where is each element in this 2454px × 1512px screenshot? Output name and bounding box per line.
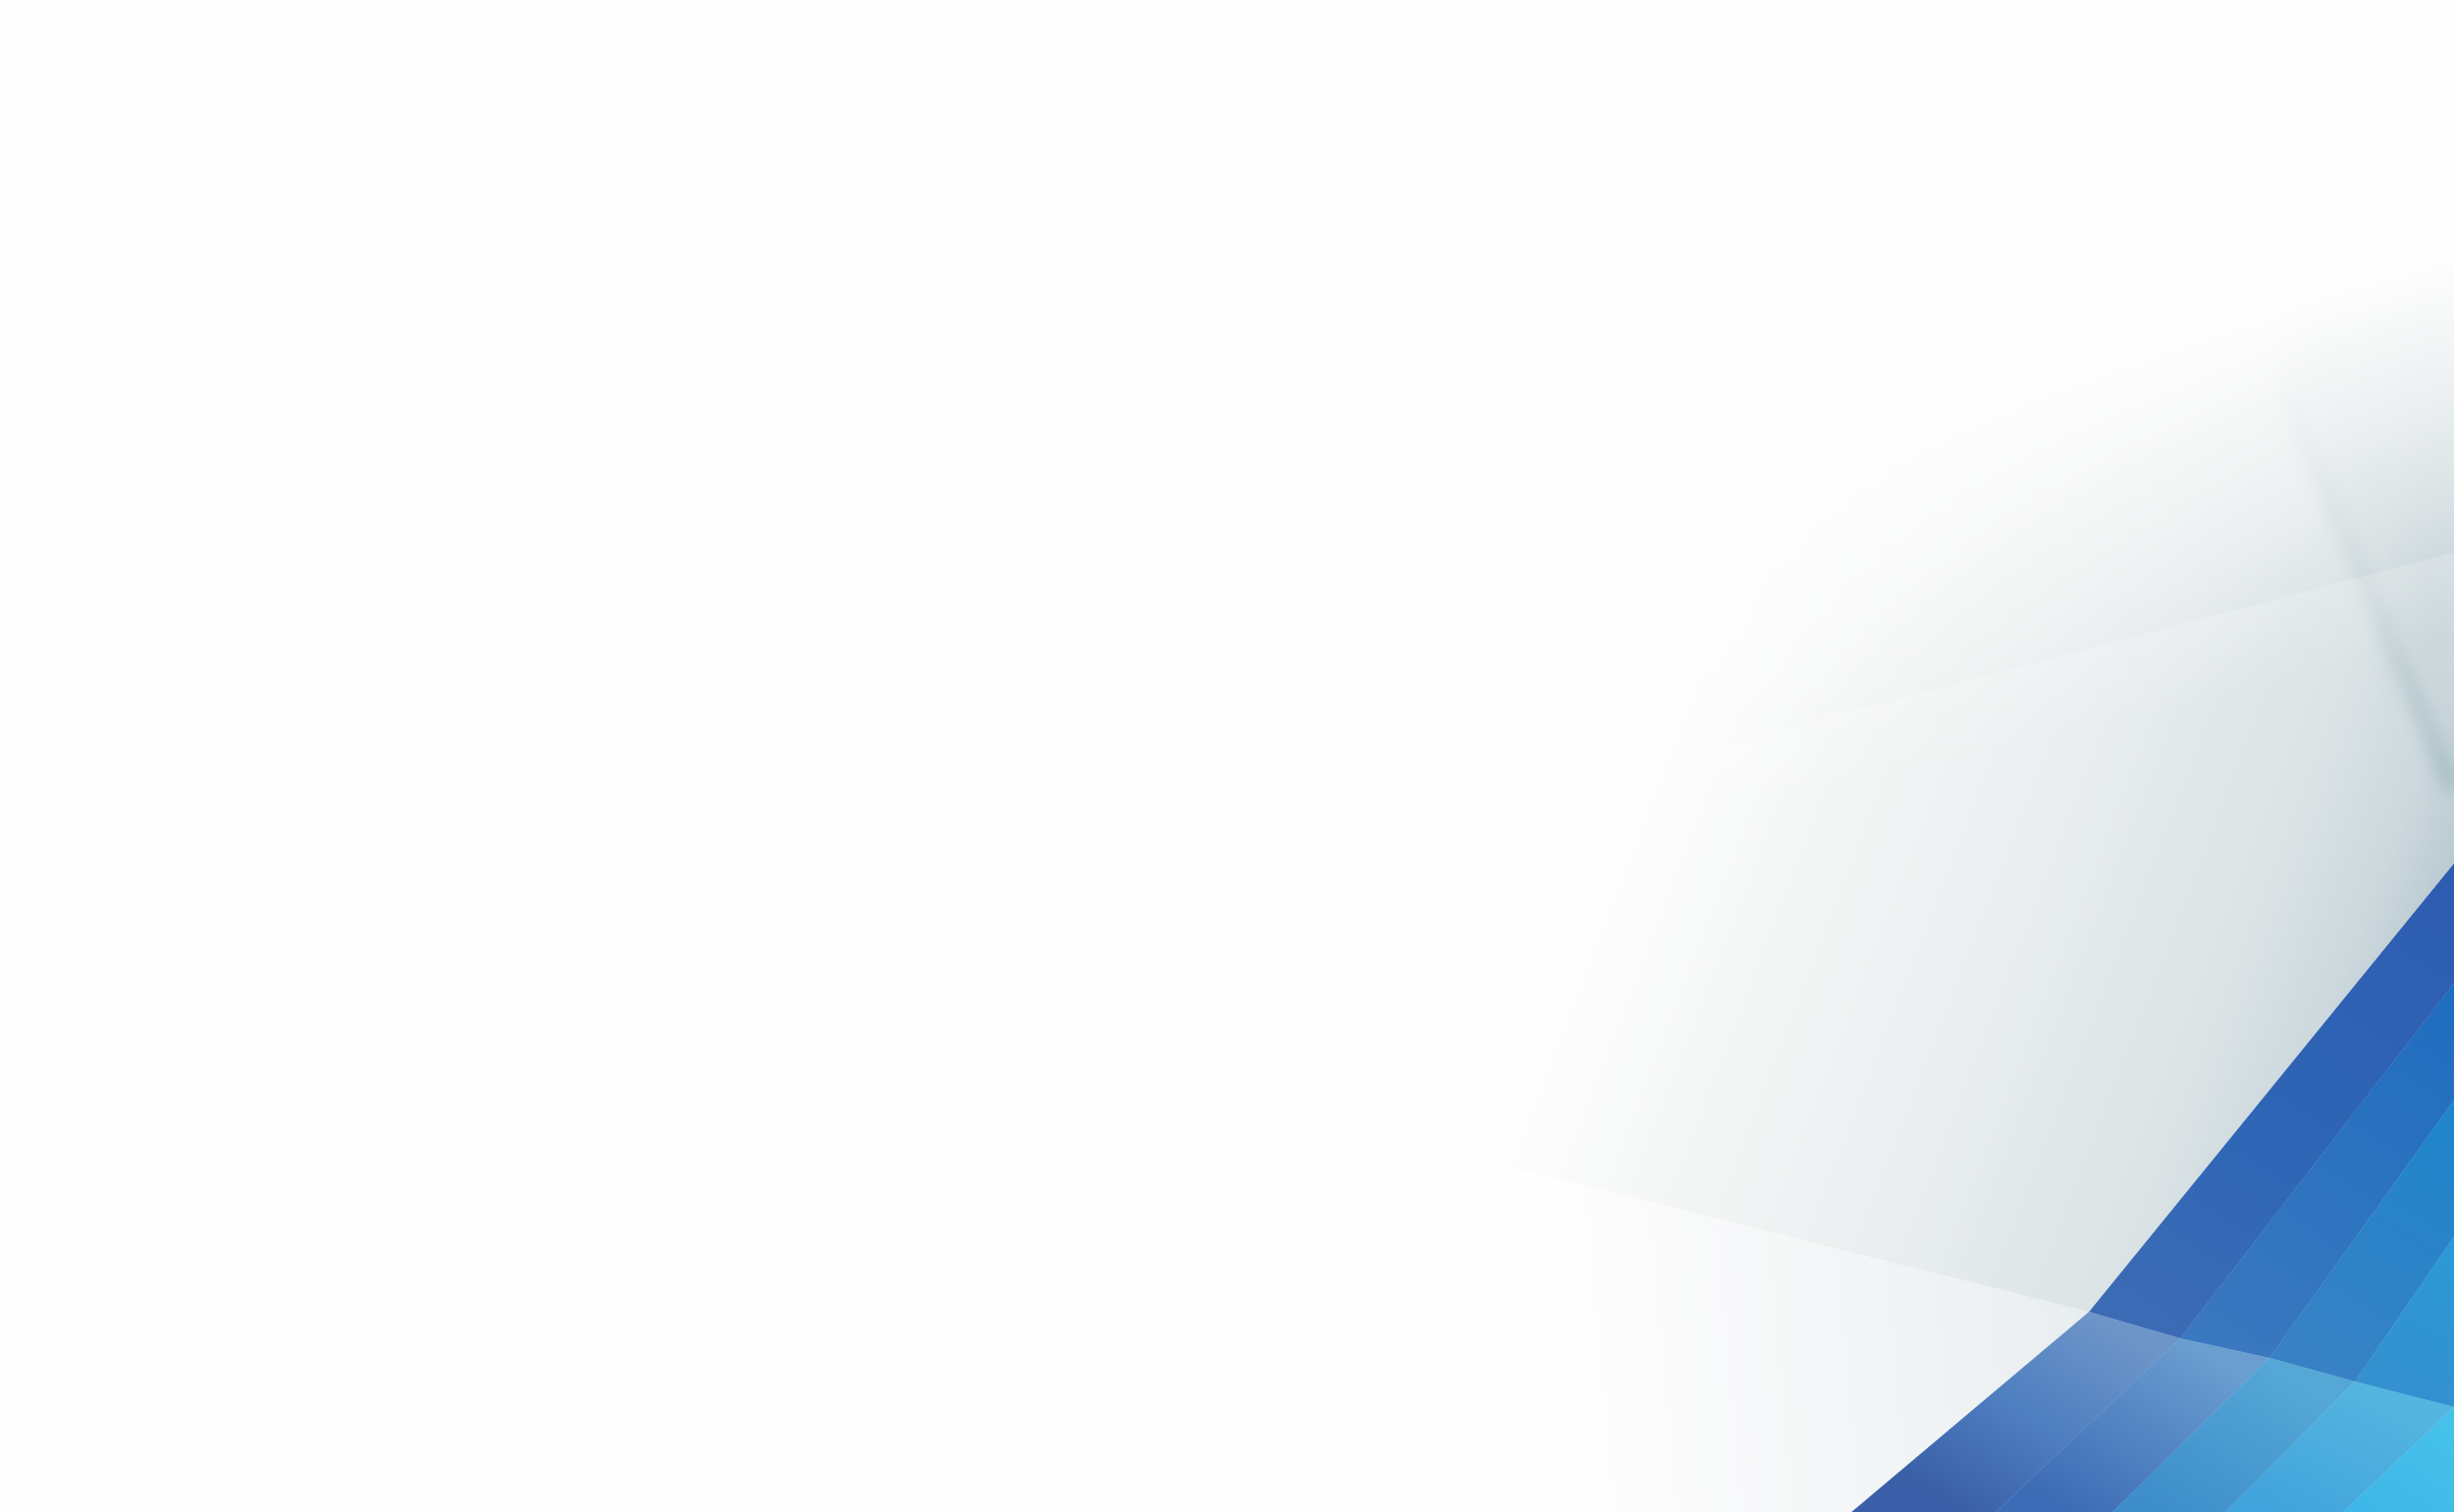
facet: lower blue band: [2113, 1358, 2355, 1512]
facet: lower mid blue band: [1996, 1338, 2270, 1512]
fold: darker zone right of streak: [2285, 98, 2454, 790]
facet: upper light blue band: [2355, 1236, 2454, 1407]
fold: soft highlight below crease: [1276, 552, 2454, 1060]
fold: white fade above crease: [1276, 0, 2454, 863]
facet: lower dark blue band: [1852, 1312, 2180, 1512]
facet: upper mid blue band: [2180, 983, 2454, 1358]
fold: diagonal dark streak: [2285, 392, 2454, 790]
facet: lower light blue band: [2225, 1382, 2454, 1512]
facet: upper dark blue band: [2089, 863, 2454, 1338]
fold: main shaded plane: [1276, 0, 2454, 1312]
facet: corner cyan band: [2343, 1407, 2454, 1512]
facet: upper blue band: [2270, 1100, 2454, 1382]
fold: lower shaded plane: [1276, 1109, 2089, 1512]
panel: blue facets: [1852, 863, 2454, 1512]
panel: grey shaded folds: [1276, 0, 2454, 1512]
